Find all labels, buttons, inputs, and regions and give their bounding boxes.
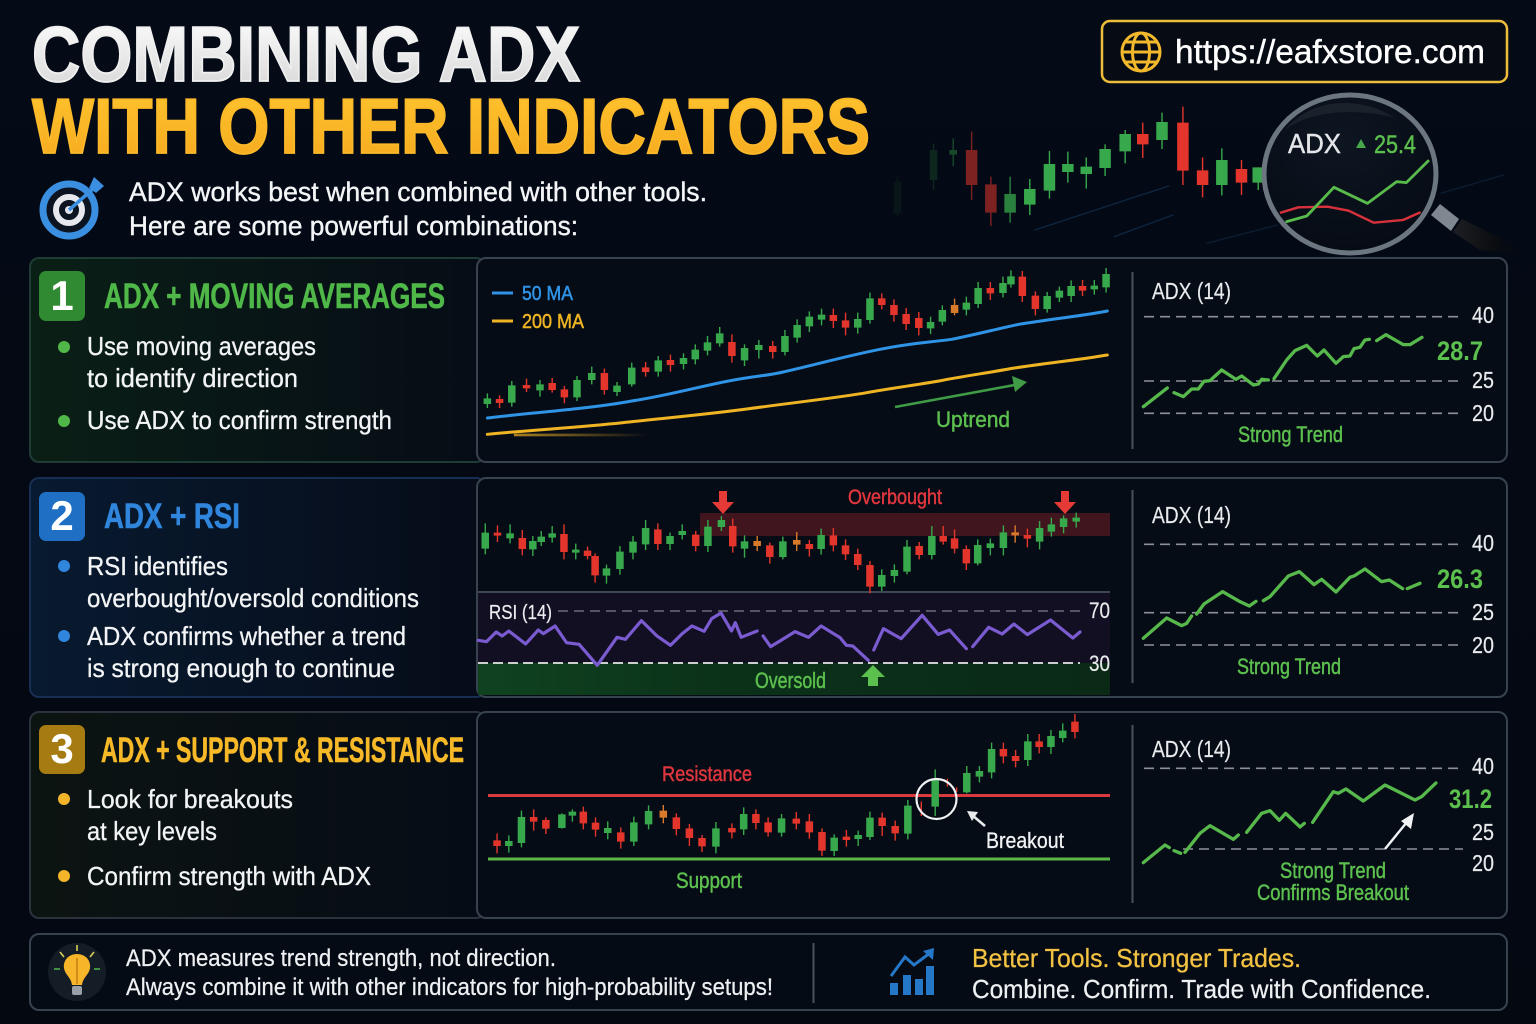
heading: ADX + MOVING AVERAGES — [104, 277, 445, 316]
heading: ADX + RSI — [104, 497, 240, 536]
tip text — [126, 945, 773, 1001]
arrow: uptrend — [895, 376, 1027, 407]
bullets: overbought/oversold conditions — [87, 583, 419, 613]
icon: magnifying glass over ADX: 25.4 — [1374, 131, 1416, 159]
RSI axis — [1089, 598, 1110, 676]
legend — [492, 283, 585, 333]
support label: Support — [676, 868, 742, 893]
panel: ADX + RSI text card — [30, 478, 485, 697]
slogan: Combine. Confirm. Trade with Confidence. — [972, 974, 1431, 1004]
RSI line — [478, 613, 1080, 665]
legend: 200 MA — [522, 311, 585, 333]
arrow: breakout — [967, 811, 985, 826]
RSI axis: 30 — [1089, 651, 1110, 676]
ADX chart 1: ADX (14) — [1152, 278, 1231, 304]
ADX chart 2: 40 — [1472, 530, 1494, 556]
icon: rising bar chart — [890, 948, 934, 995]
uptrend label: Uptrend — [936, 407, 1010, 432]
intro text — [129, 177, 707, 241]
panel: footer — [30, 934, 1507, 1010]
bullets: ADX confirms whether a trend — [87, 621, 406, 651]
bullets: at key levels — [87, 816, 217, 846]
overbought zone — [700, 513, 1110, 536]
overbought label: Overbought — [848, 486, 942, 509]
oversold label: Oversold — [755, 668, 826, 693]
icon: target with arrow — [43, 177, 104, 236]
ADX chart 1 — [1143, 278, 1494, 447]
bullets: Confirm strength with ADX — [87, 861, 371, 891]
title: COMBINING ADX — [32, 10, 580, 98]
bullets: to identify direction — [87, 363, 298, 393]
tip text: ADX measures trend strength, not direction. — [126, 945, 556, 972]
header candlestick chart — [898, 107, 1503, 243]
panel: ADX + Moving Averages text card — [30, 258, 485, 462]
ADX chart 1: 25 — [1472, 367, 1494, 393]
website link badge: https://eafxstore.com — [1175, 33, 1485, 70]
breakout circle — [916, 779, 956, 819]
ADX chart 2: 25 — [1472, 599, 1494, 625]
intro text: ADX works best when combined with other tools. — [129, 177, 707, 207]
ADX chart 3: 25 — [1472, 819, 1494, 845]
ADX chart 1: 20 — [1472, 400, 1494, 426]
slogan — [972, 943, 1431, 1004]
candlesticks — [485, 513, 1076, 593]
candlesticks — [497, 714, 1075, 856]
ADX chart 2 — [1143, 502, 1494, 679]
ADX chart 1: 28.7 — [1437, 336, 1483, 366]
candlesticks and moving averages — [487, 268, 1107, 436]
ADX chart 2: Strong Trend — [1237, 654, 1341, 679]
ADX chart 3: 31.2 — [1449, 784, 1492, 814]
ADX chart 2: 26.3 — [1437, 564, 1483, 594]
support line — [488, 858, 1110, 860]
bullets: RSI identifies — [87, 551, 228, 581]
ADX chart 2: 20 — [1472, 632, 1494, 658]
ADX chart 3: 40 — [1472, 753, 1494, 779]
badge 1: 1 — [50, 272, 74, 319]
RSI axis: 70 — [1089, 598, 1110, 623]
bullets — [58, 784, 371, 891]
tip text: Always combine it with other indicators for high-probability setups! — [126, 974, 773, 1001]
resistance label: Resistance — [662, 763, 752, 786]
RSI reference lines — [558, 610, 1080, 612]
bullets: Use ADX to confirm strength — [87, 405, 392, 435]
RSI label: RSI (14) — [489, 602, 552, 624]
ADX chart 3: Confirms Breakout — [1257, 880, 1409, 905]
magnifier handle — [1431, 204, 1520, 254]
badge 1 — [39, 271, 85, 321]
bullets: Use moving averages — [87, 331, 316, 361]
legend: 50 MA — [522, 283, 574, 305]
badge 2: 2 — [50, 492, 74, 539]
badge 2 — [39, 492, 85, 541]
ADX chart 1: 40 — [1472, 302, 1494, 328]
breakout label: Breakout — [986, 828, 1064, 853]
icon: magnifying glass over ADX — [1264, 95, 1520, 254]
intro: target icon and text — [43, 177, 707, 241]
icon: light bulb — [48, 943, 106, 1001]
heading: ADX + SUPPORT & RESISTANCE — [101, 731, 464, 770]
ADX chart 3: ADX (14) — [1152, 736, 1231, 762]
badge 3: 3 — [50, 725, 74, 772]
ADX chart 1: Strong Trend — [1238, 422, 1343, 447]
RSI pane background — [478, 592, 1110, 663]
title — [32, 10, 870, 170]
bullets: is strong enough to continue — [87, 653, 395, 683]
website link badge — [1102, 21, 1507, 82]
ADX chart 3 — [1143, 736, 1494, 905]
panel: moving averages chart — [477, 258, 1507, 462]
intro text: Here are some powerful combinations: — [129, 211, 578, 241]
ADX chart 3: 20 — [1472, 850, 1494, 876]
panel: ADX + Support and Resistance text card — [30, 712, 485, 918]
icon: magnifying glass over ADX: ADX — [1288, 128, 1341, 159]
arrow: oversold — [861, 665, 885, 686]
arrow: ADX confirms breakout — [1385, 813, 1414, 849]
bullets — [58, 551, 419, 683]
oversold zone — [478, 663, 1110, 695]
arrow: overbought left — [712, 491, 734, 514]
bullets: Look for breakouts — [87, 784, 293, 814]
panel: support and resistance chart — [477, 712, 1507, 918]
panel: RSI chart — [477, 478, 1507, 697]
ADX chart 3: Strong Trend — [1280, 858, 1386, 883]
ADX chart 2: ADX (14) — [1152, 502, 1231, 528]
arrow: overbought right — [1054, 491, 1076, 514]
icon: globe — [1122, 33, 1160, 71]
badge 3 — [39, 725, 85, 774]
title: WITH OTHER INDICATORS — [32, 82, 870, 170]
slogan: Better Tools. Stronger Trades. — [972, 943, 1301, 973]
resistance line — [488, 794, 1110, 797]
bullets — [58, 331, 392, 435]
